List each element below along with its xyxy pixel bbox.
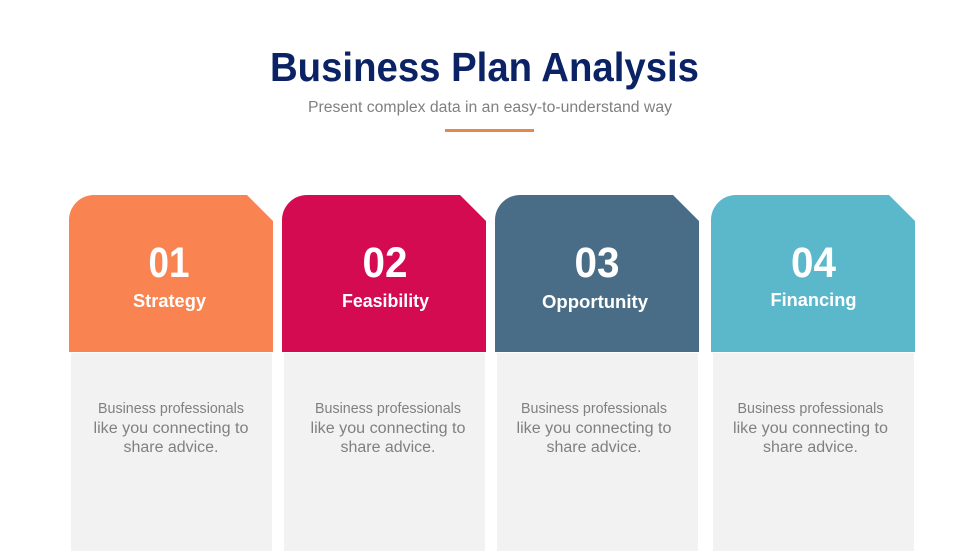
feasibility body panel: [284, 353, 485, 551]
panel: financing: [711, 195, 915, 551]
strategy header: [69, 195, 273, 352]
financing body panel: [713, 353, 914, 551]
feasibility description: Business professionals: [315, 401, 461, 417]
panel: feasibility: [282, 195, 486, 551]
accent underline: [445, 129, 534, 132]
financing label: Financing: [770, 289, 856, 310]
financing header: [711, 195, 915, 352]
opportunity number: 03: [574, 239, 620, 287]
panel: opportunity: [495, 195, 699, 551]
opportunity description: like you connecting to: [516, 420, 672, 437]
panel: strategy: [69, 195, 273, 551]
strategy number: 01: [148, 239, 190, 287]
feasibility number: 02: [362, 239, 408, 287]
strategy description: share advice.: [124, 439, 218, 456]
opportunity body panel: [497, 353, 698, 551]
financing description: like you connecting to: [733, 420, 888, 437]
financing description: Business professionals: [738, 401, 884, 417]
feasibility description: like you connecting to: [310, 420, 466, 437]
feasibility header: [282, 195, 486, 352]
strategy description: Business professionals: [98, 401, 244, 417]
subtitle: Present complex data in an easy-to-understand way: [308, 99, 672, 116]
strategy label: Strategy: [133, 290, 207, 311]
strategy description: like you connecting to: [94, 420, 248, 437]
title: Business Plan Analysis: [270, 44, 699, 90]
strategy body panel: [71, 353, 272, 551]
opportunity description: Business professionals: [521, 401, 667, 417]
feasibility description: share advice.: [340, 439, 436, 456]
feasibility label: Feasibility: [342, 290, 430, 311]
opportunity description: share advice.: [546, 439, 642, 456]
opportunity header: [495, 195, 699, 352]
opportunity label: Opportunity: [542, 291, 649, 312]
financing description: share advice.: [763, 439, 858, 456]
financing number: 04: [791, 239, 836, 287]
